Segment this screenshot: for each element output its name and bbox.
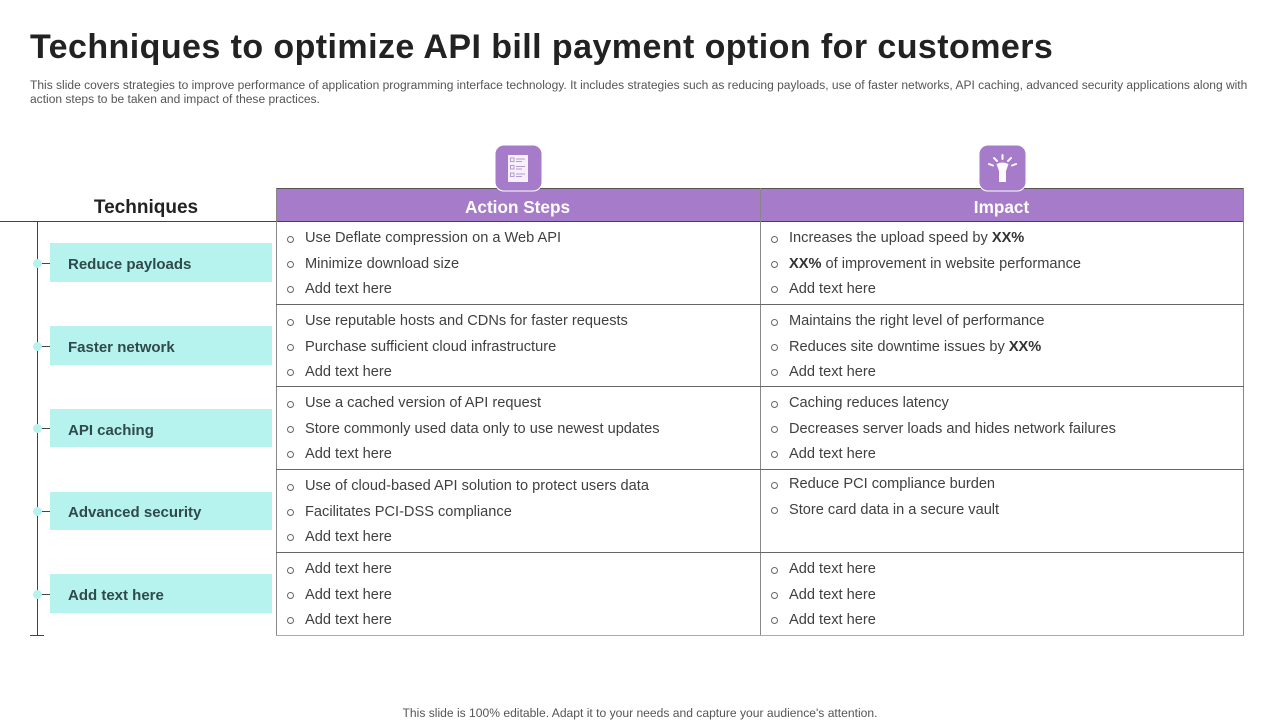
action steps: row 5: Add text here [305, 561, 392, 577]
action steps: row 3: Add text here [305, 446, 392, 462]
technique: Faster network [33, 326, 272, 365]
action steps: row 5: Add text here [305, 587, 392, 603]
icon: hand with rays [980, 146, 1026, 192]
impact: row 3: Caching reduces latency [789, 395, 949, 411]
description text: action steps to be taken and impact of these practices. [30, 92, 320, 106]
impact: row 5 [771, 561, 876, 628]
action steps: row 3: Store commonly used data only to use newest updates [305, 421, 660, 437]
header baseline rule [0, 221, 1244, 222]
technique: Add text here [33, 574, 272, 613]
timeline axis [37, 221, 38, 636]
impact: row 4 [771, 476, 999, 518]
action steps: row 4: Use of cloud-based API solution to protect users data [305, 478, 649, 494]
impact: row 1: XX% of improvement in website performance [789, 256, 1081, 272]
technique: Advanced security: Advanced security [68, 504, 201, 521]
action steps: row 2: Use reputable hosts and CDNs for faster requests [305, 313, 628, 329]
action steps: row 2: Purchase sufficient cloud infrastructure [305, 339, 556, 355]
impact: row 2: Add text here [789, 364, 876, 380]
heading: Impact: Impact [974, 197, 1029, 217]
impact: row 5: Add text here [789, 561, 876, 577]
technique: API caching [33, 409, 272, 447]
heading: Techniques: Techniques [94, 197, 198, 218]
impact: row 5: Add text here [789, 587, 876, 603]
technique: API caching: API caching [68, 422, 154, 439]
action steps: row 3: Use a cached version of API request [305, 395, 541, 411]
impact: row 5: Add text here [789, 612, 876, 628]
impact: row 3 [771, 395, 1116, 462]
action steps: row 5: Add text here [305, 612, 392, 628]
action steps: row 4 [287, 478, 649, 545]
technique: Reduce payloads [33, 243, 272, 282]
action steps: row 5 [287, 561, 392, 628]
impact: row 3: Decreases server loads and hides network failures [789, 421, 1116, 437]
description text [30, 78, 1247, 106]
impact: row 2 [771, 313, 1045, 380]
action steps: row 1: Minimize download size [305, 256, 459, 272]
table header: action steps [277, 188, 760, 221]
impact: row 1 [771, 230, 1081, 297]
impact: row 2: Maintains the right level of performance [789, 313, 1045, 329]
technique: Add text here: Add text here [68, 587, 164, 604]
action steps: row 1: Use Deflate compression on a Web API [305, 230, 561, 246]
impact: row 2: Reduces site downtime issues by XX% [789, 339, 1041, 355]
table grid lines [276, 188, 1244, 636]
heading: Action Steps: Action Steps [465, 197, 570, 217]
timeline end cap [30, 635, 44, 636]
description text: This slide covers strategies to improve performance of application programming interface technology. It includes strategies such as reducing payloads, use of faster networks, API caching, advanced security applications along with [30, 78, 1247, 92]
title: Techniques to optimize API bill payment option for customers [30, 28, 1053, 66]
action steps: row 2: Add text here [305, 364, 392, 380]
action steps: row 1: Add text here [305, 281, 392, 297]
action steps: row 4: Facilitates PCI-DSS compliance [305, 504, 512, 520]
table header: impact [761, 188, 1244, 221]
technique: Reduce payloads: Reduce payloads [68, 256, 191, 273]
action steps: row 4: Add text here [305, 529, 392, 545]
technique: Advanced security [33, 492, 272, 530]
footer note: This slide is 100% editable. Adapt it to your needs and capture your audience's attention. [403, 706, 877, 720]
action steps: row 2 [287, 313, 628, 380]
icon: checklist [496, 146, 542, 192]
impact: row 1: Increases the upload speed by XX% [789, 230, 1024, 246]
action steps: row 3 [287, 395, 660, 462]
action steps: row 1 [287, 230, 561, 297]
impact: row 4: Store card data in a secure vault [789, 502, 999, 518]
impact: row 4: Reduce PCI compliance burden [789, 476, 995, 492]
technique: Faster network: Faster network [68, 339, 175, 356]
impact: row 1: Add text here [789, 281, 876, 297]
impact: row 3: Add text here [789, 446, 876, 462]
